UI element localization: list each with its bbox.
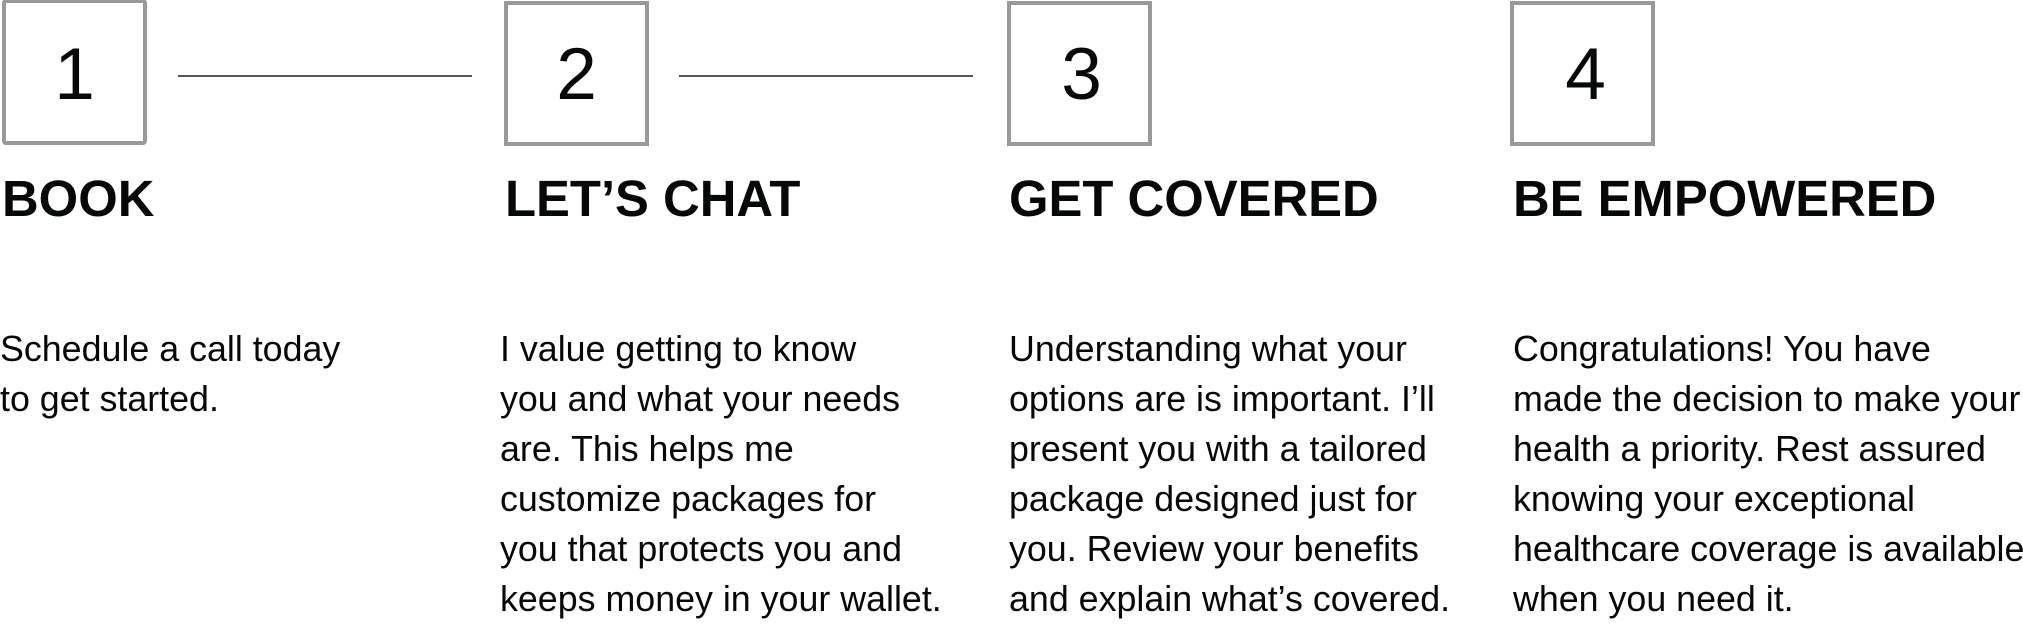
text: step 2 description: are. This helps me: [500, 429, 794, 469]
text: step 3 description: [1009, 329, 1450, 619]
text: step 2 description: you that protects you and: [500, 529, 902, 569]
text: step 2 description: keeps money in your wallet.: [500, 579, 942, 619]
text: step 2 description: you and what your needs: [500, 379, 900, 419]
text: step 2 description: I value getting to know: [500, 329, 856, 369]
heading: book: BOOK: [2, 170, 154, 227]
heading: let's chat: LET’S CHAT: [505, 170, 800, 227]
text: step 4 description: when you need it.: [1513, 579, 1794, 619]
text: step 3 description: you. Review your benefits: [1009, 529, 1419, 569]
number box 2: [504, 1, 649, 146]
number box 3: 3: [1061, 34, 1102, 115]
heading: get covered: GET COVERED: [1009, 170, 1379, 227]
text: step 1 description: Schedule a call today: [0, 329, 340, 369]
connector line 2 to 3: [679, 75, 973, 77]
text: step 3 description: present you with a tailored: [1009, 429, 1427, 469]
panel: step 2: [500, 1, 942, 619]
text: step 3 description: package designed just for: [1009, 479, 1417, 519]
panel: step 3: [1007, 1, 1450, 619]
panel: step 4: [1510, 1, 2023, 619]
text: step 4 description: knowing your exceptional: [1513, 479, 1915, 519]
number box 1: 1: [54, 34, 95, 115]
connector line 1 to 2: [178, 75, 472, 77]
number box 3: [1007, 1, 1152, 146]
text: step 3 description: options are is important. I’ll: [1009, 379, 1435, 419]
text: step 4 description: health a priority. Rest assured: [1513, 429, 1986, 469]
number box 1: [2, 0, 147, 145]
text: step 4 description: made the decision to make your: [1513, 379, 2020, 419]
text: step 2 description: [500, 329, 942, 619]
panel: step 1: [0, 0, 340, 419]
text: step 3 description: Understanding what your: [1009, 329, 1407, 369]
text: step 1 description: [0, 329, 340, 419]
text: step 1 description: to get started.: [0, 379, 219, 419]
text: step 4 description: [1513, 329, 2023, 619]
text: step 4 description: healthcare coverage is available: [1513, 529, 2023, 569]
number box 2: 2: [556, 34, 597, 115]
number box 4: [1510, 1, 1655, 146]
number box 4: 4: [1565, 34, 1606, 115]
text: step 3 description: and explain what’s covered.: [1009, 579, 1450, 619]
heading: be empowered: BE EMPOWERED: [1513, 170, 1936, 227]
text: step 2 description: customize packages for: [500, 479, 876, 519]
text: step 4 description: Congratulations! You have: [1513, 329, 1931, 369]
